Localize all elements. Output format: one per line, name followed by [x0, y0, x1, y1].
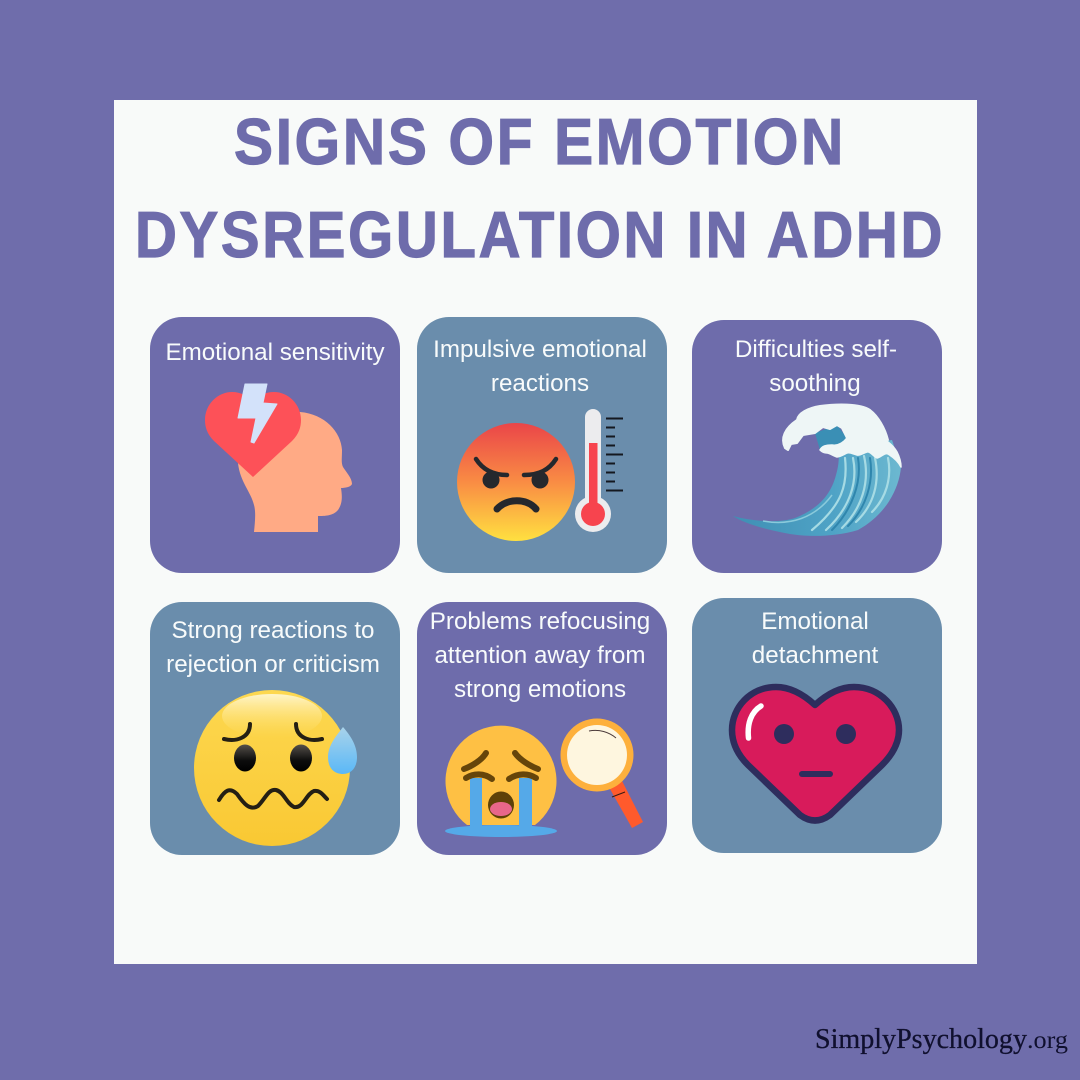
label: problems refocusing attention: strong emotions [454, 676, 626, 703]
label: strong reactions to rejection or criticism: Strong reactions to [171, 617, 375, 644]
icon: worried face [194, 690, 357, 846]
label: strong reactions to rejection or criticism: rejection or criticism [166, 651, 380, 678]
label: impulsive emotional reactions: Impulsive emotional [433, 336, 647, 363]
panel: difficulties self-soothing [692, 320, 942, 573]
icon: angry face [457, 423, 575, 541]
title: DYSREGULATION IN ADHD [135, 198, 945, 271]
icon: neutral heart [732, 687, 899, 820]
panel: impulsive emotional reactions [417, 317, 667, 573]
label: emotional detachment: detachment [752, 642, 878, 669]
panel: emotional sensitivity [150, 317, 400, 573]
icon: magnifying glass [560, 718, 643, 828]
icon: head with broken heart [205, 384, 352, 532]
label: impulsive emotional reactions: reactions [491, 370, 589, 397]
title [135, 105, 945, 271]
panel: main white sheet [114, 100, 977, 964]
label: emotional detachment: Emotional [761, 608, 869, 635]
icon: thermometer [575, 409, 623, 532]
panel: problems refocusing attention [417, 602, 667, 855]
icon: wave [733, 405, 901, 536]
label: difficulties self-soothing: Difficulties self- [735, 336, 897, 363]
panel: emotional detachment [692, 598, 942, 853]
label: problems refocusing attention: attention away from [434, 642, 646, 669]
footer: source credit: .org [1027, 1027, 1069, 1054]
panel: strong reactions to rejection or criticism [150, 602, 400, 855]
footer: source credit: SimplyPsychology [815, 1023, 1027, 1055]
label: problems refocusing attention: Problems refocusing [430, 608, 650, 635]
label: emotional sensitivity: Emotional sensitivity [165, 339, 385, 366]
icon: crying face [445, 726, 557, 837]
label: difficulties self-soothing: soothing [769, 370, 861, 397]
title: SIGNS OF EMOTION [234, 105, 846, 178]
